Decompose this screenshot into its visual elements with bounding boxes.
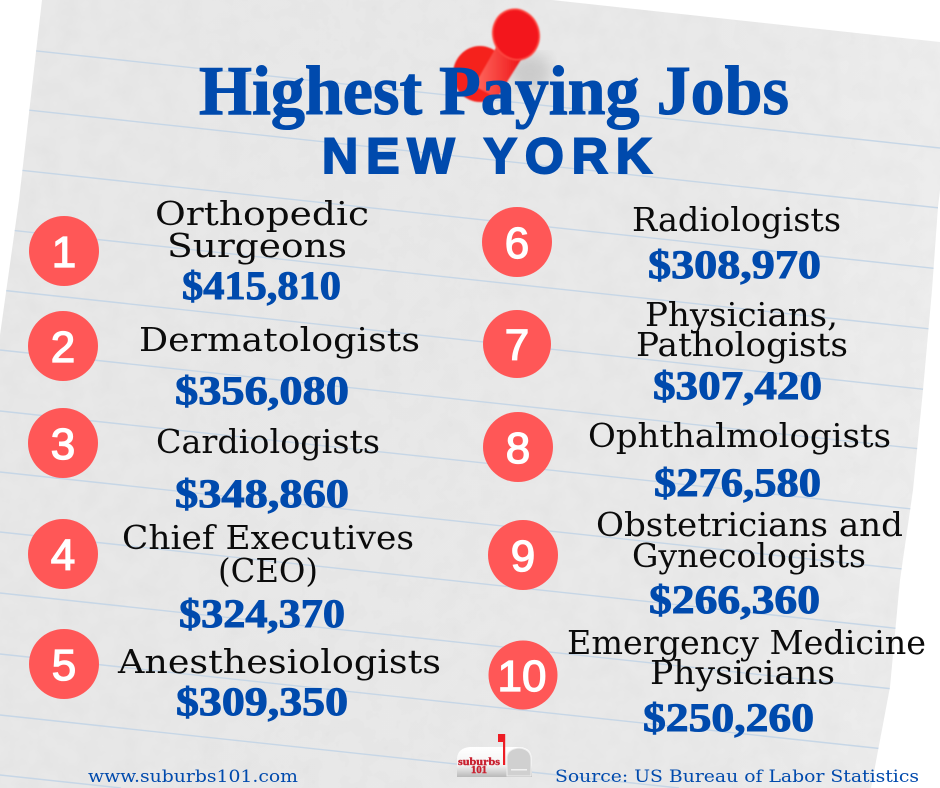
salary 6: $308,970: [648, 242, 821, 287]
salary 5: $309,350: [176, 679, 348, 724]
job label 3: Cardiologists: [156, 422, 380, 461]
icon: suburbs 101 mailbox logo: suburbs: [458, 756, 501, 768]
number badge 5: 5: [52, 641, 76, 690]
item 4: Chief Executives: [28, 518, 414, 636]
item 2: Dermatologists: [28, 311, 420, 413]
job label 4: (CEO): [218, 551, 318, 590]
icon: red push pin: [453, 3, 552, 102]
job label 2: Dermatologists: [139, 320, 420, 359]
salary 4: $324,370: [179, 591, 345, 636]
number badge 4: 4: [51, 531, 75, 580]
job label 10: Emergency Medicine: [567, 623, 926, 662]
item 10: Emergency Medicine Physicians: [488, 623, 926, 740]
number badge 5: [29, 629, 99, 699]
job label 9: [596, 505, 903, 575]
job label 1: Orthopedic: [155, 194, 369, 233]
job label 7: Pathologists: [636, 325, 848, 364]
job label 7: Physicians,: [645, 295, 838, 334]
number badge 7: [483, 310, 551, 378]
number badge 9: [488, 520, 558, 590]
job label 8: Ophthalmologists: [588, 416, 891, 455]
job label 1: [155, 194, 369, 265]
job label 6: Radiologists: [632, 200, 841, 239]
source text: Source: US Bureau of Labor Statistics: [555, 767, 919, 787]
item 8: Ophthalmologists: [483, 412, 891, 505]
website text: www.suburbs101.com: [88, 767, 298, 787]
job label 10: [567, 623, 926, 692]
number badge 1: [29, 216, 99, 286]
salary 3: $348,860: [175, 471, 349, 516]
job label 5: Anesthesiologists: [117, 642, 441, 681]
icon: suburbs 101 mailbox logo: [457, 734, 532, 777]
item 5: Anesthesiologists: [29, 629, 441, 724]
salary 9: $266,360: [649, 577, 820, 622]
job label 10: Physicians: [650, 653, 835, 692]
number badge 10: 10: [498, 652, 546, 701]
number badge 3: 3: [51, 420, 75, 469]
number badge 8: 8: [506, 424, 530, 473]
job label 9: Gynecologists: [632, 536, 866, 575]
job label 7: [636, 295, 848, 364]
number badge 8: [483, 412, 553, 482]
number badge 4: [28, 519, 98, 589]
icon: suburbs 101 mailbox logo: 101: [471, 765, 487, 776]
number badge 9: 9: [511, 532, 535, 581]
number badge 1: 1: [52, 228, 76, 277]
job label 4: Chief Executives: [122, 518, 414, 557]
number badge 6: [482, 207, 552, 277]
job label 1: Surgeons: [167, 226, 347, 265]
job label 4: [122, 518, 414, 590]
salary 7: $307,420: [653, 363, 822, 408]
number badge 7: 7: [505, 321, 529, 370]
title: Highest Paying Jobs: [199, 53, 789, 130]
item 7: Physicians, Pathologists: [483, 295, 848, 408]
number badge 2: 2: [51, 323, 75, 372]
salary 2: $356,080: [175, 368, 349, 413]
item 6: Radiologists: [482, 200, 841, 287]
number badge 3: [28, 408, 98, 478]
item 3: Cardiologists: [28, 408, 380, 516]
number badge 2: [28, 311, 98, 381]
item 1: Orthopedic Surgeons: [29, 194, 369, 308]
item 9: Obstetricians and Gynecologists: [488, 505, 903, 622]
subtitle: New York: NEW YORK: [322, 128, 652, 184]
number badge 10: [488, 640, 558, 710]
number badge 6: 6: [505, 219, 529, 268]
job label 9: Obstetricians and: [596, 505, 903, 544]
salary 1: $415,810: [182, 263, 341, 308]
salary 8: $276,580: [654, 460, 821, 505]
salary 10: $250,260: [643, 695, 814, 740]
